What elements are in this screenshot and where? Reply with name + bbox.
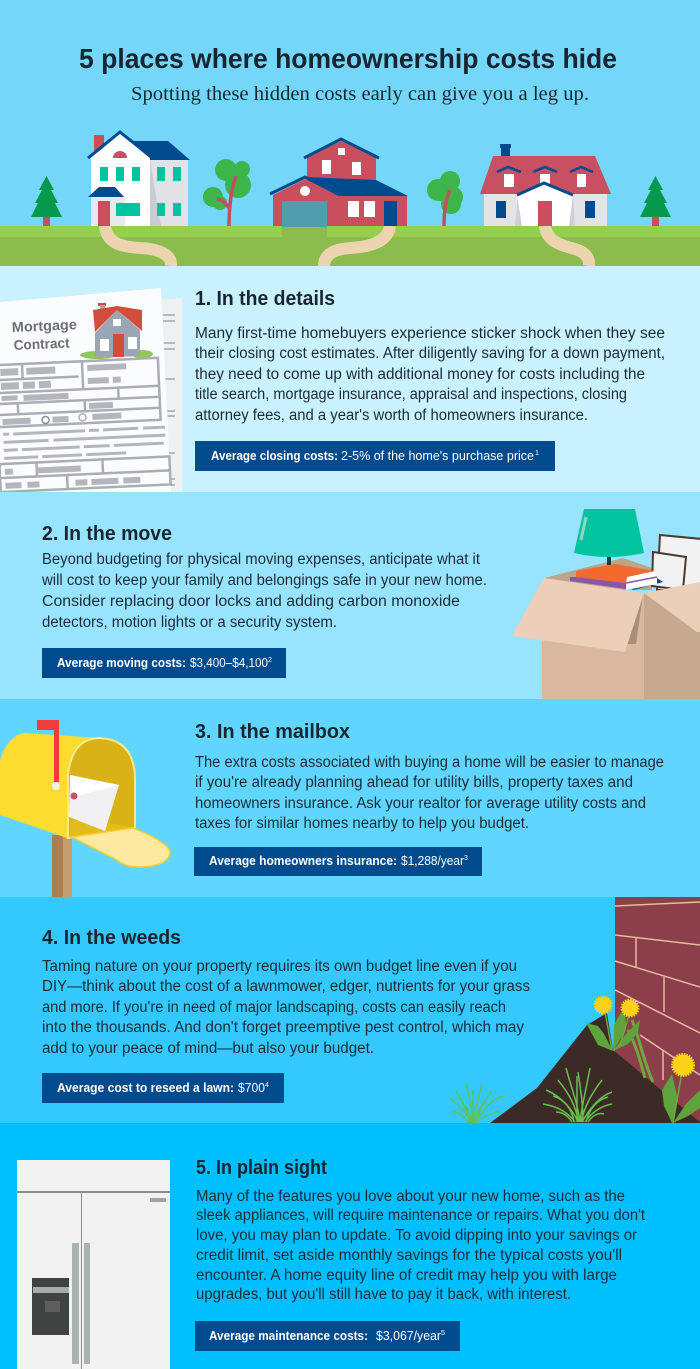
- illustration: refrigerator: [17, 1160, 170, 1369]
- illustration: mailbox: [0, 720, 170, 897]
- dandelion leaves and stems: [586, 1008, 700, 1123]
- label: mortgage contract: Contract: [13, 334, 70, 353]
- body text: and more. If you're in need of major landscaping, costs can easily reach: [42, 999, 506, 1016]
- icon: grey house with red roof: [480, 144, 611, 226]
- body text: attorney fees, and a year's worth of homeowners insurance.: [195, 407, 588, 424]
- grass: [0, 226, 700, 266]
- body text: taxes for similar homes nearby to help you budget.: [195, 815, 529, 832]
- callout: average homeowners insurance: 3: [464, 855, 468, 862]
- box rear flap: [544, 558, 652, 590]
- flag: [37, 720, 60, 790]
- envelope: [69, 775, 119, 831]
- body text: their closing cost estimates. After diligently saving for a down payment,: [195, 345, 665, 362]
- illustration: mortgage contract: [0, 288, 182, 492]
- body text: into the thousands. And don't forget preemptive pest control, which may: [42, 1019, 524, 1036]
- callout: average maintenance costs: [195, 1321, 460, 1351]
- body text: [195, 754, 664, 832]
- callout: average homeowners insurance: Average homeowners insurance:: [209, 854, 397, 868]
- body text: upgrades, but you'll still have to pay it back, with interest.: [196, 1286, 571, 1303]
- box body: [542, 593, 644, 699]
- body text: add to your peace of mind—but also your budget.: [42, 1040, 374, 1057]
- heading: 4. In the weeds: [42, 927, 181, 949]
- grass tuft left: [450, 1084, 505, 1123]
- body text: if you're already planning ahead for utility bills, property taxes and: [195, 774, 633, 791]
- callout: average closing costs: [195, 441, 555, 471]
- title: 5 places where homeownership costs hide: [79, 43, 617, 74]
- body text: Many first-time homebuyers experience sticker shock when they see: [195, 325, 665, 342]
- footpaths: [105, 226, 589, 266]
- illustration: brick wall, soil and weeds: [450, 897, 700, 1123]
- body text: credit limit, set aside monthly savings for the typical costs you'll: [196, 1247, 622, 1264]
- grass tuft right: [543, 1068, 612, 1122]
- heading: 3. In the mailbox: [195, 721, 350, 743]
- subtitle: Spotting these hidden costs early can give you a leg up.: [131, 83, 589, 105]
- panel: 2 in the move: [0, 492, 700, 699]
- body text: [41, 551, 487, 631]
- body text: [196, 1188, 646, 1303]
- icon: red house: [270, 139, 408, 227]
- callout: average cost to reseed a lawn: 4: [265, 1082, 269, 1089]
- callout: average maintenance costs: Average maintenance costs:: [209, 1329, 368, 1343]
- callout: average maintenance costs: 5: [441, 1330, 445, 1337]
- label: mortgage contract: Mortgage: [11, 316, 77, 335]
- callout: average closing costs: 1: [535, 450, 539, 457]
- callout: average cost to reseed a lawn: [42, 1073, 284, 1103]
- callout: average homeowners insurance: [194, 847, 482, 876]
- brick wall: [615, 897, 700, 1123]
- callout: average cost to reseed a lawn: $700: [238, 1081, 265, 1095]
- body text: will cost to keep your family and belongings safe in your new home.: [41, 572, 487, 589]
- panel: 3 in the mailbox: [0, 699, 700, 897]
- heading: 5. In plain sight: [196, 1157, 327, 1179]
- callout: average moving costs: 2: [268, 657, 272, 664]
- body text: [42, 958, 530, 1057]
- body text: Consider replacing door locks and adding carbon monoxide: [42, 593, 460, 610]
- books: [570, 564, 663, 590]
- icon: small house: [80, 303, 153, 359]
- body text: DIY—think about the cost of a lawnmower, edger, nutrients for your grass: [42, 978, 530, 995]
- callout: average moving costs: Average moving costs:: [57, 656, 186, 670]
- water dispenser: [32, 1278, 69, 1335]
- callout: average maintenance costs: $3,067/year: [376, 1329, 441, 1343]
- heading: 1. In the details: [195, 288, 335, 310]
- lamp: [574, 509, 644, 565]
- icon: right pine tree: [640, 176, 671, 226]
- body text: title search, mortgage insurance, appraisal and inspections, closing: [195, 386, 627, 403]
- body text: love, you may plan to update. To avoid dipping into your savings or: [196, 1227, 637, 1244]
- body text: [195, 325, 665, 424]
- body text: detectors, motion lights or a security system.: [42, 614, 337, 631]
- label: mortgage contract: [12, 322, 76, 350]
- soil mound: [490, 1013, 700, 1123]
- icon: tree two: [203, 159, 251, 226]
- illustration: moving box with lamp, books and frames: [512, 509, 700, 699]
- panel: header: [0, 0, 700, 266]
- body text: encounter. A home equity line of credit may help you with large: [196, 1267, 617, 1284]
- picture frames: [652, 535, 700, 590]
- panel: 5 in plain sight: [0, 1123, 700, 1369]
- body text: homeowners insurance. Ask your realtor for average utility costs and: [195, 795, 646, 812]
- body text: Many of the features you love about your new home, such as the: [196, 1188, 625, 1205]
- callout: average moving costs: [42, 648, 286, 678]
- dandelion flowers: [595, 997, 694, 1076]
- icon: tree three: [427, 171, 463, 226]
- body text: sleek appliances, will require maintenance or repairs. What you don't: [196, 1207, 646, 1224]
- callout: average moving costs: $3,400–$4,100: [190, 656, 268, 670]
- callout: average cost to reseed a lawn: Average cost to reseed a lawn:: [57, 1081, 234, 1095]
- body text: they need to come up with additional money for costs including the: [195, 366, 645, 383]
- body text: Taming nature on your property requires its own budget line even if you: [42, 958, 517, 975]
- callout: average closing costs: Average closing costs:: [211, 449, 338, 463]
- callout: average closing costs: 2-5% of the home's purchase price: [341, 449, 534, 463]
- callout: average homeowners insurance: $1,288/year: [401, 854, 464, 868]
- body text: The extra costs associated with buying a home will be easier to manage: [195, 754, 664, 771]
- panel: 4 in the weeds: [0, 897, 700, 1123]
- form fields: [0, 358, 171, 492]
- heading: 2. In the move: [42, 523, 172, 545]
- icon: white house: [88, 132, 190, 226]
- panel: 1 in the details: [0, 266, 700, 492]
- body text: Beyond budgeting for physical moving expenses, anticipate what it: [42, 551, 481, 568]
- icon: left pine tree: [31, 176, 62, 226]
